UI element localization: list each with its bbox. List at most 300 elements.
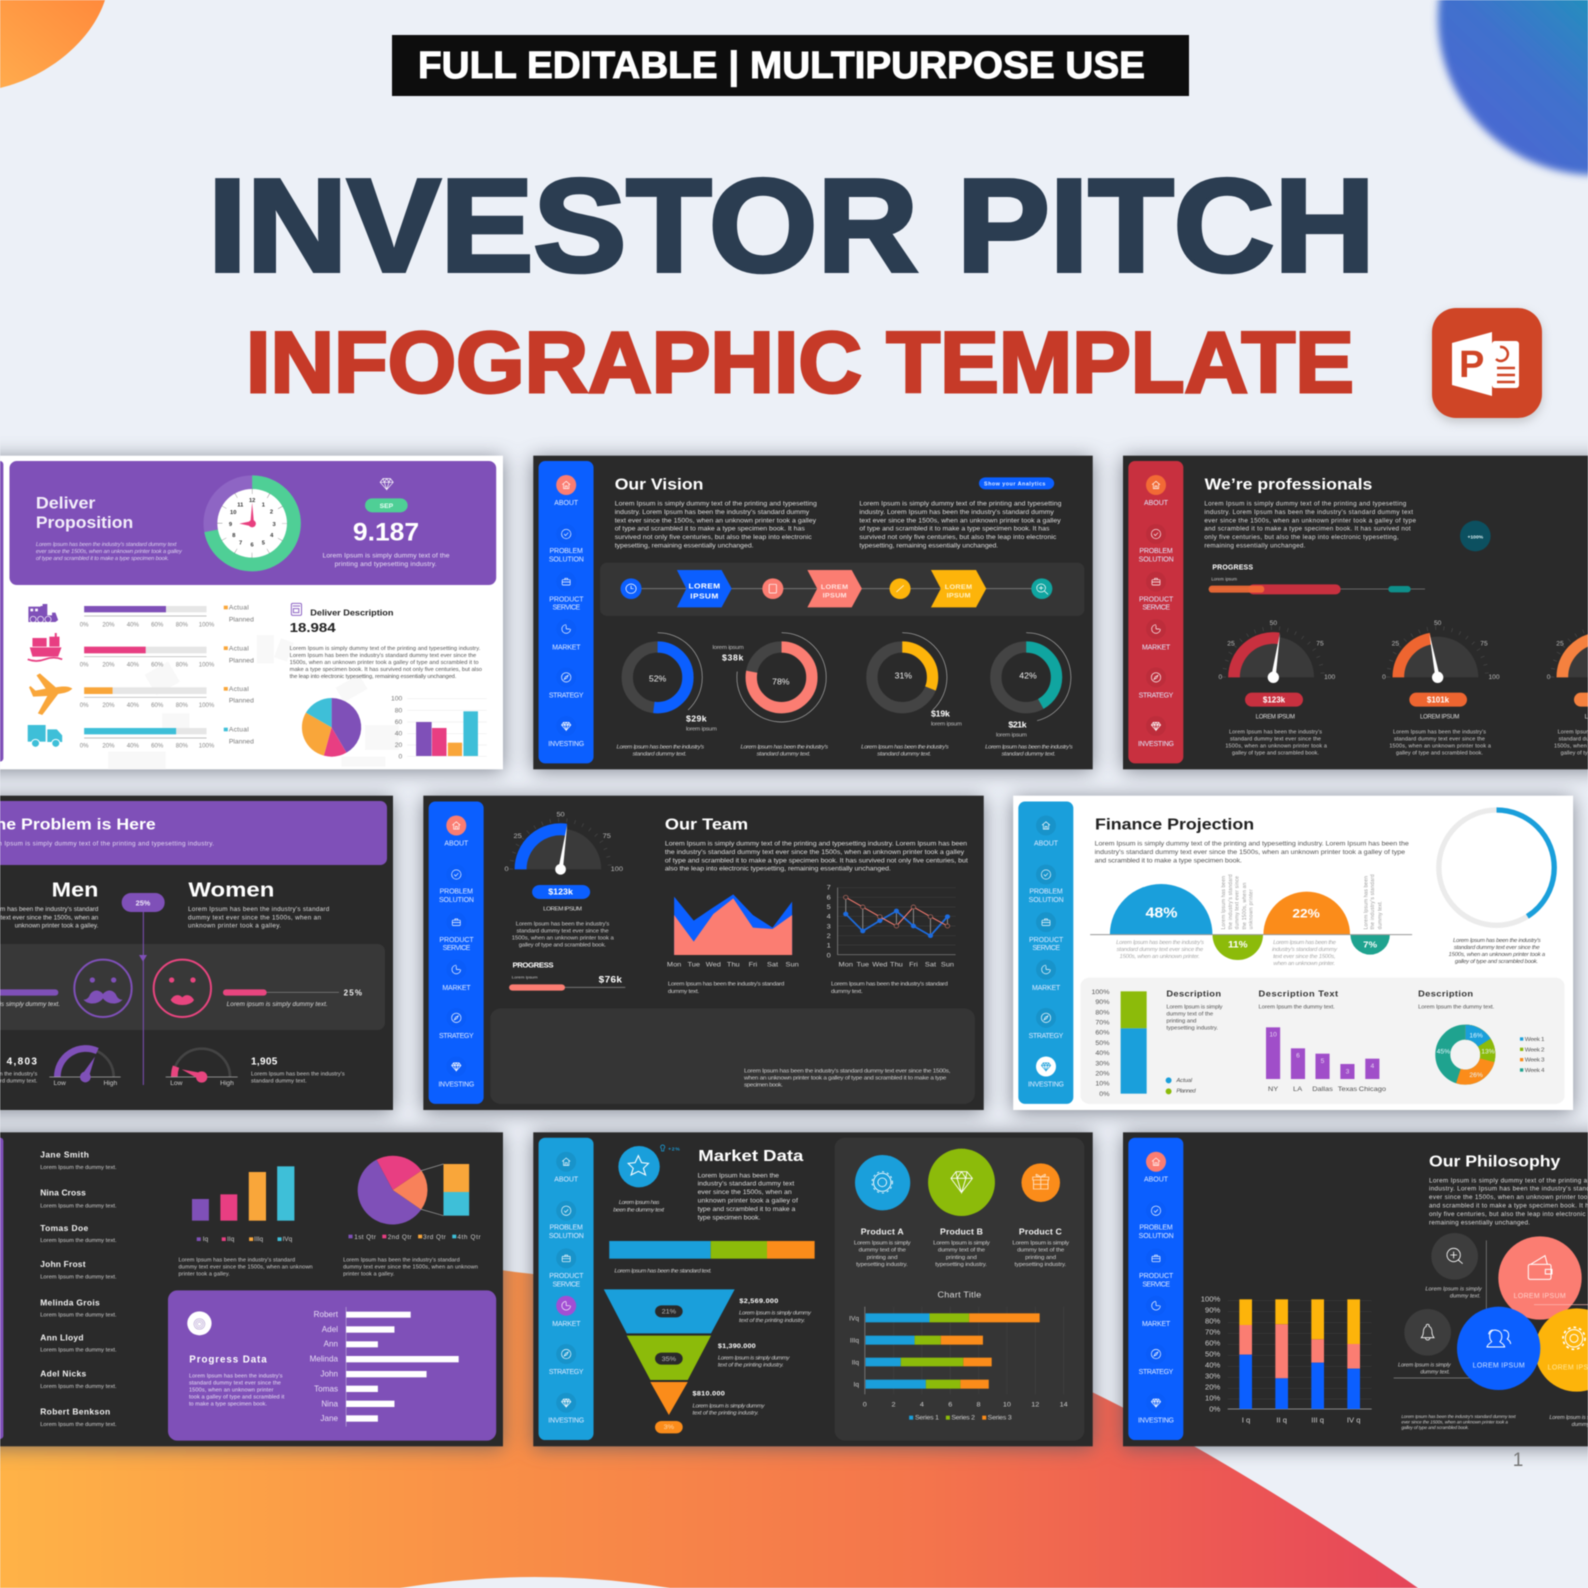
- sidebar: STRATEGY: [1139, 692, 1174, 699]
- line chart: Sun: [941, 962, 954, 968]
- gauge 2: 100: [1488, 674, 1500, 681]
- footnote left: ever since the 1500s, when an unknown printer took a: [1401, 1419, 1508, 1424]
- bar chart: [192, 1166, 294, 1243]
- stacked column chart: 90%: [1205, 1306, 1221, 1315]
- horizontal bar chart: Melinda: [310, 1355, 339, 1364]
- stacked column chart: I q: [1242, 1415, 1250, 1424]
- stacked horizontal chart: IIIq: [850, 1338, 860, 1344]
- bar: actual vs planned rows: [80, 606, 215, 749]
- panel: team list and progress data slide: [0, 1132, 503, 1446]
- coral circle: LOREM IPSUM: [1514, 1293, 1566, 1300]
- sidebar: ABOUT: [444, 840, 469, 847]
- icon: bell: [1404, 1309, 1451, 1356]
- products panel: typesetting industry.: [935, 1262, 987, 1268]
- horizontal bar chart: [310, 1307, 459, 1427]
- gauge: 50: [556, 812, 565, 819]
- chart captions: printer took a galley.: [178, 1272, 230, 1278]
- women progress: Lorem ipsum is simply dummy text.: [227, 1001, 328, 1008]
- text column 2: Lorem Ipsum is simply dummy text of the printing and typesetting: [859, 501, 1062, 508]
- products panel: Lorem Ipsum is simply: [933, 1241, 990, 1247]
- progress: PROGRESS: [512, 961, 554, 969]
- men column: unknown printer took a galley.: [15, 923, 99, 930]
- donut charts: [613, 633, 1071, 738]
- clock: 11: [237, 503, 243, 509]
- chart captions: [668, 982, 948, 995]
- description 1: [1166, 989, 1223, 1095]
- men gauge: High: [103, 1080, 117, 1087]
- sidebar: INVESTING: [1138, 1418, 1174, 1425]
- sidebar: MARKET: [552, 1321, 581, 1328]
- pie of pie chart: 3rd Qtr: [423, 1234, 447, 1241]
- funnel labels: $2,569.000: [739, 1298, 778, 1305]
- bar: actual vs planned rows: 100%: [199, 622, 215, 628]
- sidebar: PRODUCT: [549, 1273, 584, 1280]
- header text: [36, 542, 183, 562]
- stacked bar: 80%: [1095, 1010, 1110, 1016]
- sidebar: SERVICE: [1142, 1281, 1170, 1288]
- footnote left: [1401, 1414, 1516, 1430]
- stacked column chart: 50%: [1205, 1349, 1221, 1358]
- bar chart: 20: [395, 742, 402, 749]
- funnel labels: text of the printing industry.: [739, 1318, 805, 1324]
- men gauge: [49, 1048, 121, 1087]
- progress: [509, 961, 625, 991]
- description text: 1500s, when an unknown printer took a galley of type and scrambled it to: [290, 660, 479, 666]
- women column: unknown printer took a galley.: [188, 923, 281, 930]
- women gauge: High: [220, 1080, 234, 1087]
- sidebar: PRODUCT: [1139, 596, 1174, 603]
- star caption: Lorem Ipsum has: [619, 1200, 659, 1206]
- heading: Our Team: [665, 815, 748, 833]
- timeline band: LOREM: [821, 584, 848, 591]
- gauge: $123k: [548, 887, 573, 897]
- icon: fingerprint: [187, 1311, 212, 1335]
- description 1: Description: [1166, 989, 1221, 999]
- sidebar: SERVICE: [553, 1281, 581, 1288]
- stacked bar: [1091, 989, 1147, 1098]
- product labels: Product A: [861, 1227, 904, 1237]
- pie of pie chart: [348, 1156, 482, 1241]
- timeline band: IPSUM: [690, 592, 719, 600]
- sidebar: [429, 801, 484, 1104]
- donut captions: Lorem Ipsum has been the industry's: [985, 745, 1073, 750]
- men column: [0, 879, 99, 930]
- area chart: Wed: [706, 962, 721, 969]
- header text: ever since the 1500s, when an unknown printer took a galley: [36, 549, 183, 555]
- progress data panel: [168, 1290, 496, 1441]
- big number caption: printing and typesetting industry.: [335, 561, 437, 568]
- chart captions: Lorem Ipsum has been the industry's standard: [668, 982, 784, 988]
- star caption: [613, 1200, 664, 1213]
- area chart: Tue: [687, 962, 700, 969]
- progress: Lorem ipsum: [512, 975, 538, 980]
- bell caption: [1398, 1362, 1452, 1375]
- vertical notes: the industry's standard: [1228, 874, 1234, 929]
- products panel: dummy text of the: [938, 1248, 986, 1254]
- progress bar: [1209, 564, 1425, 594]
- pie of pie chart: 2nd Qtr: [388, 1234, 413, 1241]
- gauge: [504, 812, 623, 948]
- footnote left: Lorem Ipsum has been the industry's standard dummy text: [1401, 1414, 1516, 1419]
- decorative orange wave bottom: [0, 1259, 1418, 1588]
- gauge: 25: [514, 833, 522, 840]
- stacked horizontal chart: 12: [1031, 1402, 1039, 1408]
- description text: the leap into electronic typesetting, remaining essentially unchanged.: [290, 674, 457, 680]
- products panel: Lorem Ipsum is simply: [854, 1241, 911, 1247]
- text block: of type and scrambled it to make a type specimen book. It has survived not only five centuries, but: [665, 858, 968, 864]
- magnifier caption: Lorem Ipsum is simply: [1425, 1286, 1483, 1292]
- horizontal bar chart: Robert: [314, 1310, 339, 1319]
- vertical notes: the industry's standard: [1370, 874, 1376, 929]
- text block: ever since the 1500s, when an: [698, 1189, 792, 1196]
- vertical notes: Lorem Ipsum has been: [1221, 876, 1227, 929]
- bar: actual vs planned rows: 60%: [151, 663, 164, 669]
- gauge: 100: [611, 866, 623, 873]
- text column 1: survived not only five centuries, but also the leap into electronic: [615, 534, 812, 541]
- text block: industry. Lorem Ipsum has been the industry's standard dummy text: [1204, 509, 1413, 516]
- bar: actual vs planned rows: 0%: [80, 622, 89, 628]
- clock: 1: [262, 503, 265, 509]
- gauge 3: [1547, 628, 1588, 756]
- heading: We’re professionals: [1205, 476, 1373, 493]
- description 1: Lorem Ipsum is simply: [1166, 1005, 1223, 1011]
- lower panel: [490, 1008, 975, 1104]
- donut captions: Lorem Ipsum has been the industry's: [617, 745, 704, 750]
- line chart: Fri: [909, 962, 918, 968]
- men gauge: Low: [54, 1080, 66, 1087]
- ring chart: [1439, 810, 1554, 925]
- big number caption: Lorem Ipsum is simply dummy text of the: [322, 553, 450, 560]
- vertical notes: the 1500s, when an: [1242, 883, 1248, 929]
- heading: Our Vision: [615, 476, 703, 493]
- sidebar: [1128, 461, 1183, 763]
- description 3 with donut: Week 4: [1525, 1068, 1545, 1074]
- vertical notes: unknown printer: [1248, 889, 1255, 929]
- month pill: SEP: [380, 503, 394, 510]
- sidebar: PRODUCT: [439, 937, 474, 944]
- line chart: [827, 885, 956, 968]
- stacked bar: 0%: [1099, 1091, 1110, 1098]
- description 2 with bars: Chicago: [1359, 1086, 1386, 1093]
- chart captions: Lorem Ipsum has been the industry's standard: [343, 1258, 460, 1264]
- funnel: 3%: [664, 1424, 674, 1431]
- gauge: Lorem Ipsum has been the industry's: [516, 922, 610, 927]
- description 3 with donut: Lorem Ipsum the dummy text.: [1418, 1005, 1495, 1011]
- vertical notes: [1221, 874, 1383, 929]
- bar: actual vs planned rows: 0%: [80, 663, 89, 669]
- description 2 with bars: 10: [1269, 1032, 1277, 1039]
- text block: unknown printer took a galley of: [698, 1198, 798, 1204]
- sidebar: MARKET: [1142, 1321, 1171, 1328]
- panel: our team slide: [423, 796, 984, 1110]
- description 3 with donut: Description: [1418, 989, 1473, 999]
- icon: powerpoint: [1432, 308, 1542, 422]
- bar: actual vs planned rows: 20%: [102, 663, 115, 669]
- bar: actual vs planned rows: 100%: [199, 663, 215, 669]
- funnel labels: $810.000: [692, 1391, 725, 1398]
- icon: gear: [855, 1155, 910, 1210]
- icon: train: [28, 604, 58, 622]
- chart captions: dummy text.: [668, 989, 700, 995]
- panel: deliver proposition slide: [0, 456, 503, 769]
- gauge 1: 0: [1218, 674, 1222, 681]
- header text: Lorem Ipsum has been the industry's standard dummy text: [36, 542, 177, 548]
- team list: Jane Smith: [40, 1150, 89, 1160]
- stacked horizontal chart: Series 1: [915, 1415, 939, 1422]
- bar: actual vs planned rows: 60%: [151, 743, 164, 749]
- stacked horizontal chart: 10: [1003, 1402, 1011, 1408]
- timeline band: LOREM: [688, 582, 720, 591]
- sidebar: ABOUT: [1034, 840, 1059, 847]
- month pill: [365, 498, 408, 512]
- stacked horizontal chart: 2: [891, 1402, 896, 1408]
- heading: Finance Projection: [1095, 815, 1254, 833]
- description 2 with bars: LA: [1293, 1086, 1302, 1093]
- stacked column chart: 80%: [1205, 1317, 1221, 1326]
- trend note: +2%: [668, 1147, 680, 1153]
- stacked horizontal chart: IVq: [849, 1316, 860, 1322]
- donut captions: [617, 745, 1073, 757]
- gauge 1: [1218, 620, 1336, 756]
- gauge: galley of type and scrambled book.: [519, 943, 607, 948]
- line chart: 7: [827, 885, 831, 892]
- product labels: [861, 1227, 1062, 1237]
- legends: Actual: [229, 727, 249, 734]
- description text: make a type specimen book. It has survived not only five centuries, but also: [290, 667, 482, 673]
- funnel labels: text of the printing industry.: [718, 1363, 784, 1368]
- icon: gift: [1021, 1163, 1060, 1202]
- text column 2: [859, 501, 1062, 549]
- clock: [211, 482, 294, 564]
- gauge 2: 0: [1382, 674, 1386, 681]
- horizontal bar chart: Jane: [320, 1414, 339, 1423]
- clock: 6: [251, 542, 254, 548]
- sidebar: ABOUT: [554, 1177, 579, 1184]
- blue circle: [1457, 1307, 1540, 1390]
- donut charts: 52%: [649, 674, 667, 684]
- bar chart: 100: [391, 696, 403, 703]
- icon: magnifier: [1431, 1233, 1478, 1280]
- donut charts: lorem ipsum: [712, 645, 744, 651]
- women stat: Lorem Ipsum has been the industry's: [251, 1072, 345, 1078]
- badge: full editable: [392, 35, 1189, 96]
- description 3 with donut: Week 1: [1525, 1037, 1545, 1043]
- half chart captions: industry's standard dummy: [1272, 947, 1338, 953]
- bar: actual vs planned rows: 80%: [176, 703, 189, 709]
- yellow circle: [1535, 1308, 1588, 1392]
- text block: type specimen book.: [698, 1215, 761, 1221]
- ring caption: standard dummy text ever since the: [1454, 945, 1540, 951]
- description 3 with donut: Week 2: [1525, 1048, 1545, 1053]
- text column 2: industry. Lorem Ipsum has been the industry's standard dummy: [859, 509, 1055, 516]
- line chart: Wed: [872, 962, 887, 968]
- header text: of type and scrambled it to make a type specimen book.: [36, 556, 169, 562]
- team list: Lorem Ipsum the dummy text.: [40, 1422, 117, 1428]
- description heading: Deliver Description: [310, 608, 393, 618]
- sidebar: PROBLEM: [1139, 548, 1173, 555]
- sidebar: PRODUCT: [1139, 1273, 1174, 1280]
- stacked column chart: 20%: [1205, 1383, 1221, 1392]
- bar: actual vs planned rows: 0%: [80, 703, 89, 709]
- ring caption: galley of type and scrambled book.: [1455, 959, 1538, 965]
- analytics pill: [979, 477, 1054, 489]
- bar: actual vs planned rows: 60%: [151, 703, 164, 709]
- donut charts: lorem ipsum: [996, 733, 1027, 738]
- half chart captions: Lorem Ipsum has been the industry's: [1116, 940, 1204, 946]
- sidebar: INVESTING: [548, 1418, 584, 1425]
- women progress: [223, 988, 362, 1008]
- women gauge: [166, 1049, 238, 1087]
- funnel labels: Lorem Ipsum is simply dummy: [692, 1404, 766, 1409]
- stacked bar: 100%: [1091, 989, 1110, 996]
- clock: 12: [249, 498, 255, 504]
- donut charts: $21k: [1008, 720, 1027, 729]
- product labels: Product C: [1019, 1227, 1062, 1237]
- stacked column chart: 100%: [1201, 1295, 1221, 1304]
- text block: the industry's standard dummy text ever since the 1500s, when an unknown printer took a galley: [665, 849, 965, 856]
- stacked bar: 10%: [1095, 1081, 1110, 1088]
- products panel: dummy text of the: [859, 1248, 907, 1254]
- magnifier caption: [1425, 1286, 1483, 1299]
- heading: deliver proposition: Deliver: [36, 494, 96, 513]
- timeline band: [600, 563, 1084, 616]
- horizontal bar chart: Tomas: [314, 1384, 338, 1393]
- description 3 with donut: 45%: [1437, 1049, 1450, 1056]
- text block: and scrambled it to make a type specimen book. It has survived not: [1204, 526, 1411, 533]
- bar: actual vs planned rows: 40%: [127, 663, 140, 669]
- bar: actual vs planned rows: 40%: [127, 703, 140, 709]
- bar: actual vs planned rows: 0%: [80, 743, 89, 749]
- product labels: Product B: [940, 1227, 983, 1237]
- line chart: 3: [827, 924, 831, 930]
- gauge 2: galley of type and scrambled book.: [1396, 750, 1483, 756]
- vertical notes: dummy text.: [1377, 901, 1383, 929]
- text block: Lorem Ipsum is simply dummy text of the printing and typesetting industry. Lorem Ipsum has been the: [1095, 841, 1409, 848]
- stacked column chart: II q: [1276, 1415, 1287, 1424]
- men face icon: [74, 960, 132, 1017]
- clock: 4: [270, 533, 274, 539]
- text column 2: survived not only five centuries, but also the leap into electronic: [859, 534, 1057, 541]
- gauge 2: $101k: [1427, 695, 1450, 704]
- center divider: 25%: [136, 898, 151, 907]
- progress bar: Lorem ipsum: [1211, 577, 1237, 582]
- legends: Actual: [229, 686, 249, 693]
- horizontal bar chart: John: [320, 1370, 338, 1379]
- donut charts: $19k: [931, 709, 950, 719]
- lower panel: specimen book.: [744, 1083, 783, 1089]
- team list: John Frost: [40, 1259, 86, 1269]
- bar chart: IVq: [283, 1236, 293, 1243]
- bar chart: IIq: [227, 1236, 235, 1243]
- stacked bar: 30%: [1095, 1061, 1110, 1067]
- gauge 1: 100: [1324, 674, 1336, 681]
- text column 1: text ever since the 1500s, when an unknown printer took a galley: [615, 518, 817, 524]
- team list: Melinda Grois: [40, 1297, 100, 1307]
- stacked bar: 20%: [1095, 1071, 1110, 1078]
- chart captions: dummy text.: [831, 989, 863, 995]
- bar: actual vs planned rows: 100%: [199, 703, 215, 709]
- donut charts: lorem ipsum: [686, 727, 717, 733]
- chart captions: printer took a galley.: [343, 1272, 395, 1278]
- horizontal bar chart: Adel: [322, 1325, 338, 1334]
- description 3 with donut: 13%: [1481, 1049, 1495, 1056]
- text block: Lorem Ipsum has been the: [698, 1173, 779, 1179]
- badge: full editable: FULL EDITABLE | MULTIPURPOSE USE: [418, 45, 1145, 87]
- bar chart: IIIq: [254, 1236, 264, 1243]
- clock: 10: [230, 510, 236, 516]
- horizontal bar chart: Ann: [324, 1340, 338, 1349]
- funnel labels: Lorem Ipsum is simply dummy: [718, 1356, 791, 1361]
- description 1: dummy text of the: [1166, 1012, 1213, 1018]
- text block: [1429, 1177, 1588, 1226]
- sidebar: SOLUTION: [549, 556, 584, 563]
- donut captions: standard dummy text.: [633, 752, 687, 757]
- gauge 2: 1500s, when an unknown printer took a: [1389, 743, 1492, 749]
- sidebar: SOLUTION: [439, 897, 474, 904]
- sidebar: INVESTING: [548, 741, 584, 748]
- bell caption: dummy text.: [1420, 1369, 1450, 1375]
- line chart: 5: [827, 904, 831, 911]
- big number: 9.187: [353, 519, 419, 547]
- description 1: typesetting industry.: [1166, 1026, 1218, 1032]
- description 3 with donut: Week 3: [1525, 1058, 1545, 1064]
- center divider: [122, 893, 165, 1085]
- products panel: Lorem Ipsum is simply: [1012, 1241, 1069, 1247]
- women stat: 1,905: [251, 1057, 278, 1068]
- men stat: 4,803: [7, 1057, 37, 1068]
- legends: Planned: [229, 616, 254, 623]
- donut charts: 78%: [772, 677, 790, 687]
- slide shadows: [0, 458, 1588, 1448]
- text block: remaining essentially unchanged.: [1204, 542, 1306, 549]
- stacked horizontal chart: Series 2: [951, 1415, 975, 1422]
- gauge 3: 0: [1547, 674, 1551, 681]
- progress: $76k: [599, 975, 623, 986]
- sidebar: STRATEGY: [1139, 1369, 1174, 1376]
- men stat: [0, 1057, 38, 1085]
- half chart captions: when an unknown printer.: [1273, 961, 1335, 967]
- area chart: [667, 894, 799, 969]
- funnel: 35%: [662, 1356, 676, 1363]
- description 1: Planned: [1176, 1089, 1197, 1095]
- donut charts: 31%: [895, 671, 913, 680]
- description 1: Actual: [1175, 1078, 1193, 1084]
- icon: star: [618, 1146, 660, 1187]
- products panel: printing and: [946, 1255, 977, 1261]
- lower panel: [1080, 978, 1565, 1104]
- gauge: 75: [603, 833, 611, 840]
- text block: Lorem Ipsum is simply dummy text of the printing and typesetting: [1204, 501, 1407, 508]
- sidebar: STRATEGY: [549, 1369, 584, 1376]
- sidebar: INVESTING: [1028, 1081, 1064, 1088]
- icon: plane: [29, 673, 72, 715]
- lower panel: Lorem Ipsum has been the industry's standard dummy text ever since the 1500s,: [744, 1069, 951, 1075]
- sidebar: STRATEGY: [549, 692, 584, 699]
- description 2 with bars: [1259, 989, 1386, 1093]
- description 2 with bars: Dallas: [1312, 1086, 1333, 1093]
- half circle chart: [1090, 884, 1412, 960]
- team list: Lorem Ipsum the dummy text.: [40, 1203, 117, 1209]
- stacked bar: 60%: [1095, 1030, 1110, 1037]
- gauge 1: 25: [1227, 641, 1235, 648]
- clock: 2: [270, 510, 273, 516]
- clock: 9: [229, 522, 232, 528]
- gauge 1: $123k: [1263, 695, 1286, 704]
- women face icon: [154, 960, 211, 1017]
- stacked horizontal chart: 4: [920, 1402, 924, 1408]
- line chart: 0: [827, 953, 831, 959]
- description 2 with bars: Lorem Ipsum the dummy text.: [1259, 1005, 1335, 1011]
